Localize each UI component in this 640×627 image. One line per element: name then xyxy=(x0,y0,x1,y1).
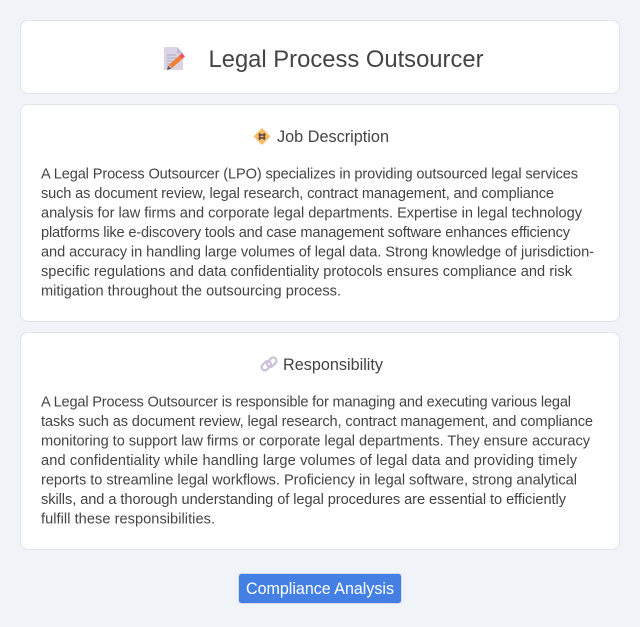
text block: job description: platforms like e-discovery tools and case management software enhances efficiency xyxy=(41,225,571,241)
button: compliance analysis: Compliance Analysis xyxy=(246,580,394,598)
title: Legal Process Outsourcer xyxy=(208,46,484,73)
text block: job description: and accuracy in handling large volumes of legal data. Strong knowledge of jurisdiction- xyxy=(41,244,594,260)
panel: job description card xyxy=(20,104,620,322)
text block: job description xyxy=(41,166,594,300)
text block: job description: mitigation throughout the outsourcing process. xyxy=(41,284,341,300)
icon: document with pencil xyxy=(164,47,184,70)
panel: title card xyxy=(20,20,620,94)
icon: chain link xyxy=(260,356,278,372)
icon: orange diamond sign xyxy=(254,128,270,145)
text block: job description: such as document review, legal research, contract management, and compliance xyxy=(41,186,554,202)
text block: responsibility: reports to streamline legal workflows. Proficiency in legal software, strong analytical xyxy=(41,472,577,488)
button: compliance analysis xyxy=(238,574,402,604)
panel: responsibility card xyxy=(20,332,620,550)
text block: responsibility: and confidentiality while handling large volumes of legal data and providing timely xyxy=(41,453,578,469)
text block: responsibility: monitoring to support law firms or corporate legal departments. They ensure accuracy xyxy=(41,434,591,450)
text block: responsibility: fulfill these responsibilities. xyxy=(41,512,215,528)
text block: responsibility: tasks such as document review, legal research, contract management, and compliance xyxy=(41,414,593,430)
text block: job description: analysis for law firms and corporate legal departments. Expertise in legal technology xyxy=(41,206,583,222)
text block: job description: specific regulations and data confidentiality protocols ensures compliance and risk xyxy=(41,264,573,280)
heading: job description: Job Description xyxy=(277,128,389,146)
text block: responsibility: A Legal Process Outsourcer is responsible for managing and executing various legal xyxy=(41,394,571,410)
text block: job description: A Legal Process Outsourcer (LPO) specializes in providing outsourced legal services xyxy=(41,166,578,182)
heading: responsibility: Responsibility xyxy=(283,356,384,374)
text block: responsibility xyxy=(41,394,593,528)
text block: responsibility: skills, and a thorough understanding of legal procedures are essential to efficiently xyxy=(41,492,567,508)
